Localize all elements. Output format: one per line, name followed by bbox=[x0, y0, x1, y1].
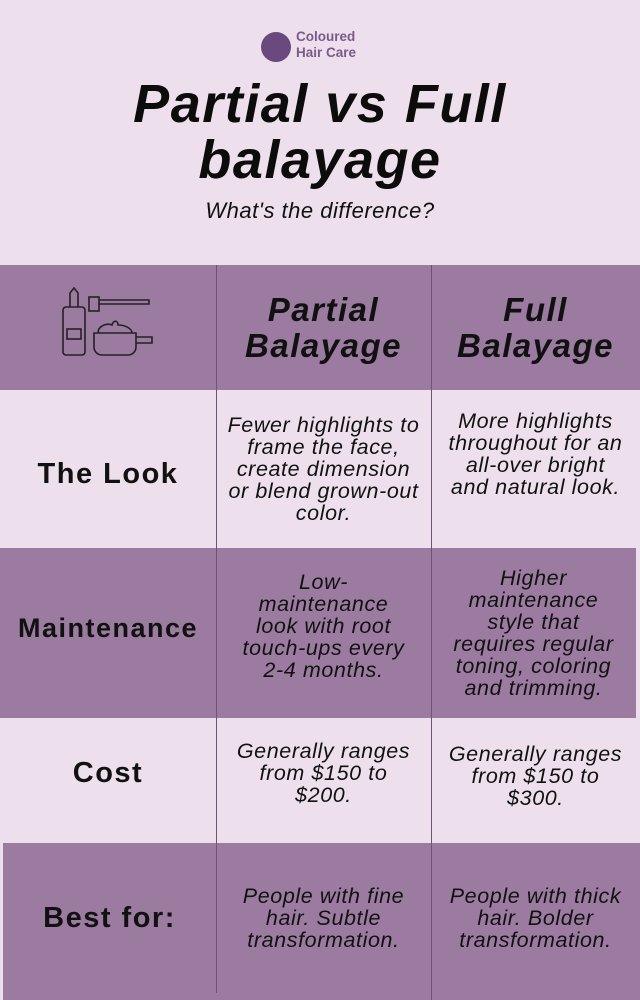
row: The Look: The Look bbox=[38, 458, 178, 490]
row: Maintenance: style that bbox=[487, 610, 580, 634]
icon: logo circle bbox=[261, 32, 291, 62]
row: Maintenance: 2-4 months. bbox=[263, 658, 384, 682]
row: Maintenance: Low- bbox=[299, 570, 348, 594]
table bbox=[0, 265, 640, 1000]
row: Best for bbox=[3, 843, 640, 1000]
icon: hair dye tools bbox=[62, 287, 153, 356]
row: Cost: from $150 to bbox=[472, 764, 599, 788]
row: Best for: hair. Bolder bbox=[477, 906, 594, 930]
row: The Look: create dimension bbox=[237, 457, 410, 481]
row: Cost: Generally ranges bbox=[237, 739, 410, 763]
row: Best for: hair. Subtle bbox=[266, 906, 381, 930]
row: Cost: $200. bbox=[295, 783, 352, 807]
logo text bbox=[296, 29, 356, 60]
logo text: Hair Care bbox=[296, 45, 356, 60]
row: Maintenance: Higher bbox=[500, 566, 567, 590]
row: Cost: from $150 to bbox=[260, 761, 387, 785]
row: Maintenance: and trimming. bbox=[464, 676, 603, 700]
row: The Look: throughout for an bbox=[449, 431, 622, 455]
row: The Look: or blend grown-out bbox=[228, 479, 419, 503]
row: Maintenance: maintenance bbox=[259, 592, 388, 616]
row: Best for: People with thick bbox=[450, 884, 621, 908]
header: Partial Balayage: Balayage bbox=[245, 326, 402, 364]
title: balayage bbox=[198, 130, 442, 190]
row: Maintenance: toning, coloring bbox=[456, 654, 611, 678]
row: The Look bbox=[38, 409, 622, 525]
header: Full Balayage bbox=[457, 290, 614, 364]
row: Maintenance: look with root bbox=[256, 614, 391, 638]
row: Cost: $300. bbox=[507, 786, 564, 810]
row: Best for: transformation. bbox=[247, 928, 400, 952]
row: Cost bbox=[73, 739, 622, 810]
row: Maintenance: Maintenance bbox=[18, 612, 198, 642]
logo text: Coloured bbox=[296, 29, 355, 44]
header row bbox=[0, 265, 640, 390]
header: Partial Balayage bbox=[245, 290, 402, 364]
row: The Look: More highlights bbox=[458, 409, 613, 433]
row: The Look: color. bbox=[296, 501, 351, 525]
row: The Look: frame the face, bbox=[247, 435, 400, 459]
row: Best for: People with fine bbox=[243, 884, 404, 908]
row: The Look: and natural look. bbox=[451, 475, 620, 499]
row: Best for: Best for: bbox=[43, 902, 176, 934]
row: Maintenance: maintenance bbox=[469, 588, 598, 612]
title bbox=[133, 74, 507, 190]
row: Best for: transformation. bbox=[459, 928, 612, 952]
row: Maintenance bbox=[0, 548, 636, 718]
subtitle: What's the difference? bbox=[205, 198, 435, 223]
row: The Look: all-over bright bbox=[466, 453, 605, 477]
header: Full Balayage: Full bbox=[503, 290, 568, 328]
title: Partial vs Full bbox=[133, 74, 507, 134]
row: Maintenance: touch-ups every bbox=[243, 636, 404, 660]
row: Maintenance: requires regular bbox=[453, 632, 614, 656]
row: Cost: Cost bbox=[73, 756, 143, 788]
header: Full Balayage: Balayage bbox=[457, 326, 614, 364]
row: Cost: Generally ranges bbox=[449, 742, 622, 766]
header: Partial Balayage: Partial bbox=[268, 290, 379, 328]
logo bbox=[261, 29, 356, 62]
row: The Look: Fewer highlights to bbox=[228, 413, 419, 437]
